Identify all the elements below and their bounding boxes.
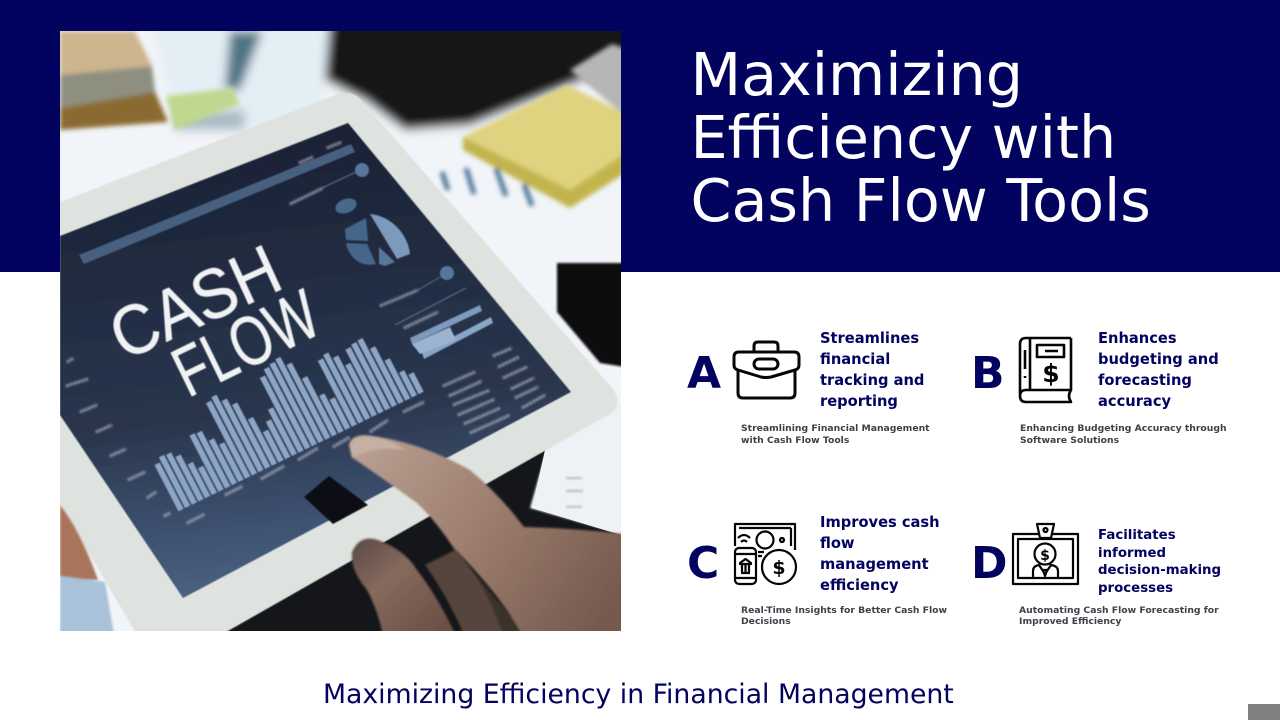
footer caption: Maximizing Efficiency in Financial Management xyxy=(323,679,954,710)
heading B: accuracy xyxy=(1098,393,1171,410)
heading D: processes xyxy=(1098,580,1173,596)
heading B xyxy=(1098,330,1219,410)
icon: ledger book xyxy=(1018,336,1072,404)
tablet screen xyxy=(60,123,571,598)
paper under tablet xyxy=(530,405,625,535)
title: Efficiency with xyxy=(690,104,1116,172)
heading B: forecasting xyxy=(1098,372,1192,389)
item D xyxy=(971,522,1221,627)
caption B xyxy=(1020,423,1227,446)
caption C xyxy=(741,604,947,627)
small horizontal bars xyxy=(410,305,482,344)
header band xyxy=(0,0,1280,272)
icon: banknote, phone and coin: $ xyxy=(772,557,786,579)
letter D: D xyxy=(971,538,1008,589)
heading A xyxy=(820,330,924,410)
heading C: flow xyxy=(820,535,854,552)
heading C: efficiency xyxy=(820,577,899,594)
title: Maximizing xyxy=(690,41,1023,109)
photo: tablet showing cash flow dashboard xyxy=(60,31,621,631)
letter C: C xyxy=(687,538,719,589)
caption B: Software Solutions xyxy=(1020,434,1119,446)
heading D: decision-making xyxy=(1098,563,1221,578)
CASH FLOW heading: FLOW xyxy=(160,275,331,411)
pie chart xyxy=(333,196,410,266)
heading A: Streamlines xyxy=(820,330,919,347)
tablet bezel xyxy=(40,93,618,640)
heading A: reporting xyxy=(820,393,898,410)
heading D: Facilitates xyxy=(1098,528,1176,543)
caption C: Real-Time Insights for Better Cash Flow xyxy=(741,604,947,616)
letter B: B xyxy=(971,348,1005,399)
caption C: Decisions xyxy=(741,616,791,627)
corner tab xyxy=(1248,704,1280,720)
caption A: Streamlining Financial Management xyxy=(741,423,930,434)
screen notch xyxy=(304,476,368,524)
blurred books and notes xyxy=(60,31,630,208)
item B xyxy=(971,330,1227,446)
CASH FLOW heading: CASH xyxy=(98,230,292,375)
title: Cash Flow Tools xyxy=(690,167,1151,235)
title xyxy=(690,41,1151,235)
caption D: Improved Efficiency xyxy=(1019,616,1121,627)
heading A: tracking and xyxy=(820,372,924,389)
caption B: Enhancing Budgeting Accuracy through xyxy=(1020,423,1227,434)
caption A: with Cash Flow Tools xyxy=(741,434,849,446)
heading C xyxy=(820,514,940,594)
heading A: financial xyxy=(820,351,890,368)
dashboard widgets xyxy=(66,142,545,523)
letter A: A xyxy=(687,348,721,399)
blurred desk background xyxy=(50,20,640,640)
caption D xyxy=(1019,604,1219,627)
heading B: Enhances xyxy=(1098,330,1177,347)
progress bar xyxy=(79,144,355,264)
caption A xyxy=(741,423,930,446)
icon: framed financial advisor xyxy=(1012,522,1080,586)
bar chart xyxy=(154,338,424,512)
heading C: Improves cash xyxy=(820,514,940,531)
dark surface below tablet xyxy=(205,450,621,640)
black object at right xyxy=(557,263,625,367)
icon: framed financial advisor: $ xyxy=(1040,548,1050,564)
pointing hand xyxy=(349,435,625,640)
blurred labels xyxy=(66,142,545,523)
caption D: Automating Cash Flow Forecasting for xyxy=(1019,604,1219,616)
item A xyxy=(687,330,930,446)
left hand and shirt cuff xyxy=(60,505,115,640)
heading D: informed xyxy=(1098,546,1166,560)
heading B: budgeting and xyxy=(1098,351,1219,368)
heading D xyxy=(1098,528,1221,596)
icon: banknote, phone and coin xyxy=(734,522,798,586)
item C xyxy=(687,514,947,627)
icon: briefcase xyxy=(732,340,800,400)
heading C: management xyxy=(820,556,929,573)
CASH FLOW heading xyxy=(112,244,316,397)
icon: ledger book: $ xyxy=(1042,359,1060,388)
